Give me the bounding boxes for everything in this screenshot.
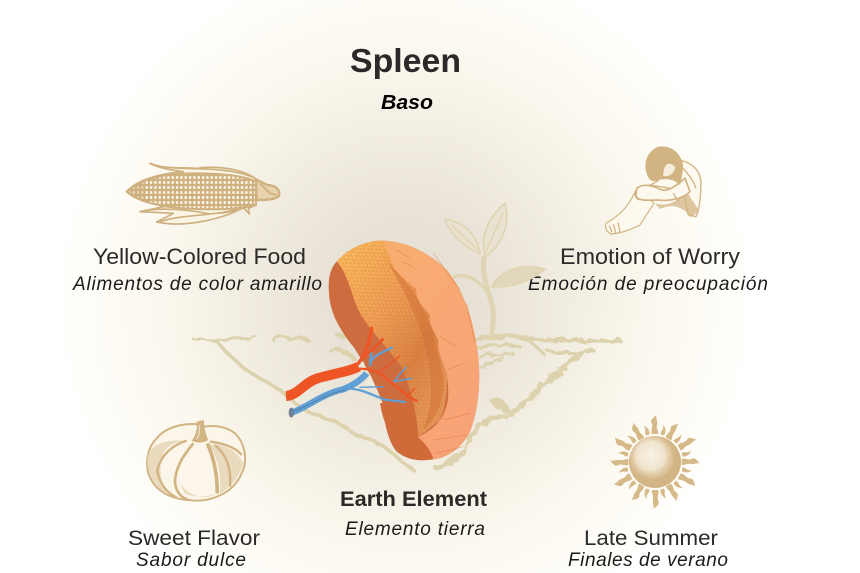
subtitle: Baso	[381, 92, 433, 114]
label: emotion of worry: Emoción de preocupación	[528, 274, 768, 295]
hilum veins: vein	[292, 348, 411, 413]
icon: pumpkin	[147, 420, 245, 501]
label: emotion of worry	[528, 244, 768, 295]
hilum gaps	[358, 362, 375, 387]
label: sweet flavor: Sweet Flavor	[128, 527, 260, 550]
label: sweet flavor: Sabor dulce	[136, 550, 246, 571]
label: earth element	[340, 487, 487, 540]
label: late summer: Late Summer	[584, 527, 718, 550]
icon: worried child	[606, 146, 701, 234]
label: earth element: Elemento tierra	[345, 519, 485, 540]
label: late summer	[568, 527, 728, 571]
vein cut end	[289, 408, 294, 418]
icon: corn	[127, 163, 279, 224]
spleen back surface	[329, 241, 479, 460]
hilum veins: artery	[286, 328, 417, 401]
label: sweet flavor	[128, 527, 260, 571]
title: Spleen	[350, 42, 461, 79]
label: emotion of worry: Emotion of Worry	[560, 244, 740, 269]
label: earth element: Earth Element	[340, 487, 487, 511]
soil surface and outline	[193, 334, 620, 470]
label: late summer: Finales de verano	[568, 550, 728, 571]
label: yellow-colored food	[72, 244, 322, 295]
icon: plant	[445, 203, 545, 335]
label: yellow-colored food: Alimentos de color amarillo	[72, 274, 322, 295]
spleen light peach surface	[383, 241, 479, 459]
label: yellow-colored food: Yellow-Colored Food	[93, 244, 306, 269]
icon: sun	[610, 415, 700, 509]
spleen ridged middle layer	[337, 241, 447, 437]
plant and soil illustration	[193, 203, 620, 470]
icon: spleen organ	[286, 241, 479, 460]
